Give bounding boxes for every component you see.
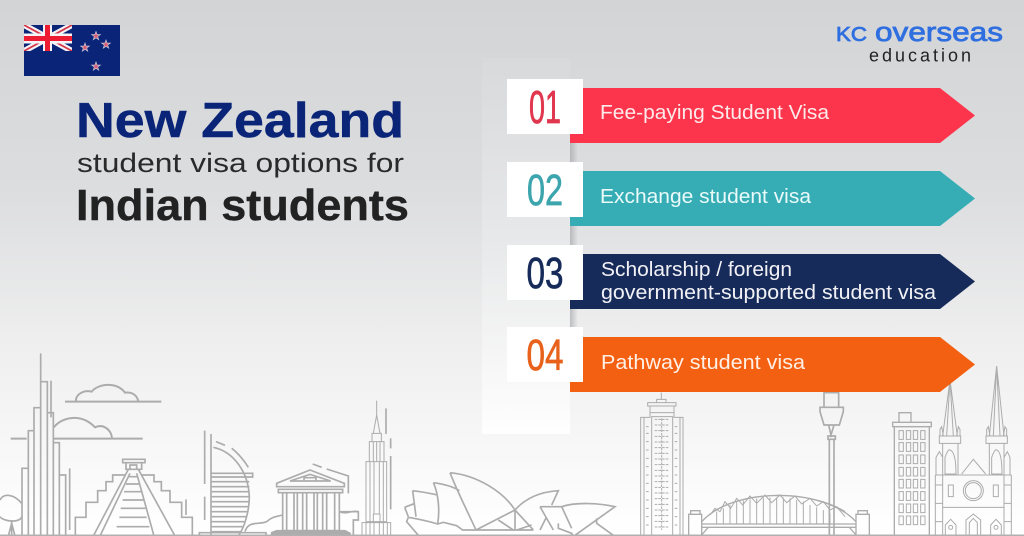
item 03	[507, 245, 975, 309]
title	[76, 94, 409, 230]
item 02: 02	[527, 166, 563, 215]
flag of New Zealand	[24, 25, 120, 76]
skyline left	[0, 353, 391, 536]
ground line	[0, 534, 1024, 536]
panel shadow	[570, 130, 578, 340]
title: New Zealand	[76, 94, 404, 148]
item 01	[507, 79, 975, 143]
item 02: Exchange student visa	[600, 186, 812, 208]
item 01: Fee-paying Student Visa	[600, 102, 830, 124]
item 03: 03	[526, 249, 564, 298]
skyline right	[641, 366, 1011, 535]
logo: KC overseas education: overseas	[875, 17, 1003, 47]
title: Indian students	[76, 181, 409, 230]
skyline: opera house	[405, 473, 615, 535]
item 03: Scholarship / foreign	[601, 259, 792, 281]
logo: KC overseas education: education	[869, 46, 971, 66]
logo: KC overseas education: KC	[836, 24, 867, 46]
item 02	[507, 162, 975, 226]
item 01: 01	[529, 81, 561, 133]
item 04: Pathway student visa	[601, 352, 806, 374]
panel behind numbers	[482, 58, 570, 434]
item 04	[507, 327, 975, 392]
title: student visa options for	[77, 148, 404, 178]
item 04: 04	[526, 331, 564, 380]
item 03: government-supported student visa	[601, 282, 937, 304]
logo: KC overseas education	[836, 17, 1003, 66]
